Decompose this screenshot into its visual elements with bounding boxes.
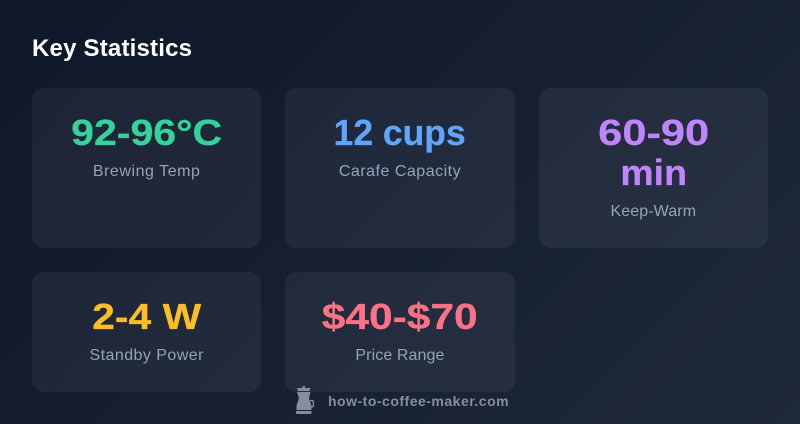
label: carafe capacity: Carafe Capacity [339, 163, 461, 180]
footer: site url: how-to-coffee-maker.com [328, 393, 509, 409]
value: keep-warm: 60-90 [598, 112, 709, 153]
value: price range: $40-$70 [322, 296, 478, 337]
panel: price range [285, 272, 515, 392]
value: carafe capacity: 12 cups [334, 112, 466, 153]
value: brewing temp: 92-96°C [71, 112, 222, 153]
value: keep-warm: min [620, 152, 687, 193]
icon: coffee maker [296, 386, 314, 414]
value: keep-warm [598, 112, 709, 193]
label: keep-warm: Keep-Warm [610, 203, 696, 220]
label: standby power: Standby Power [89, 347, 204, 364]
panel: carafe capacity [285, 88, 515, 248]
panel: keep-warm [539, 88, 768, 248]
label: brewing temp: Brewing Temp [93, 163, 200, 180]
value: standby power: 2-4 W [92, 296, 201, 337]
panel: brewing temp [32, 88, 261, 248]
panel: standby power [32, 272, 261, 392]
title: Key Statistics [32, 35, 192, 62]
label: price range: Price Range [355, 347, 445, 364]
